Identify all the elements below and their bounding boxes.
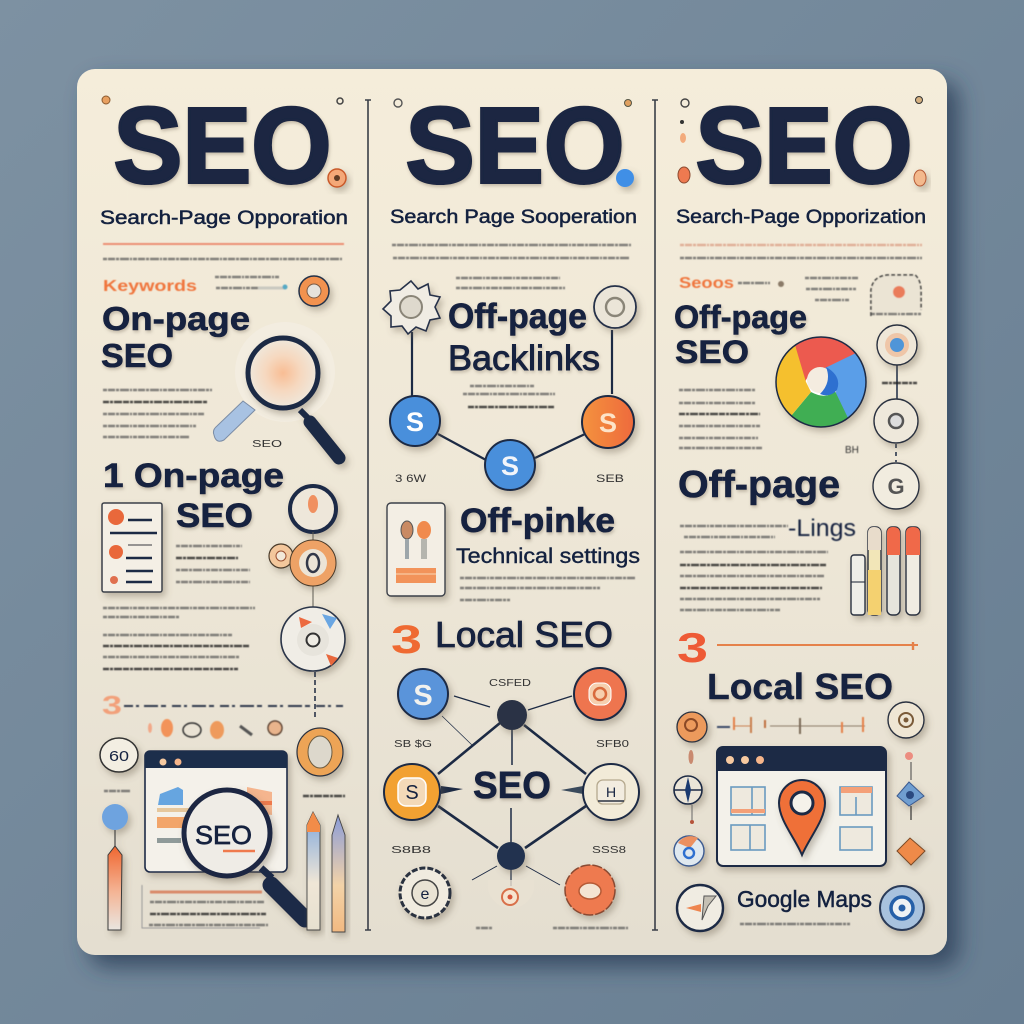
label left: 3 6W [395,473,427,485]
orange rule arrow [717,642,918,650]
icon: orange rose ring [677,712,707,742]
centre SEO label: SEO [473,765,551,807]
small labels [391,678,630,856]
icon: chrome logo [776,337,866,427]
lines label [103,608,255,617]
map tiles [731,787,872,850]
small labels: SFB0 [596,739,630,750]
icon: blue eye [897,782,924,806]
section heading off-pinke: Off-pinke [460,502,615,540]
icon: tiny drop left [688,750,694,764]
icon: ring G: G [887,474,905,499]
icon: orange dot [914,170,926,186]
small labels: SB $G [394,739,432,750]
network connectors [438,696,586,886]
body text block 3 [103,635,250,669]
subtitle: Search-Page Opporization [676,207,926,228]
body text block 2 [176,546,250,582]
node S orange right [582,396,634,448]
section heading SEO line: SEO [101,337,173,374]
icon: document checklist [102,503,162,592]
icon: beige spiral ring [888,702,924,738]
icon: magnifier over window: SEO [195,820,252,850]
tile accents [731,787,872,813]
icon: orange dot [328,169,346,187]
icon: side markers [678,96,922,183]
icon: navy ring [290,486,336,532]
icon: ring blue [877,325,917,365]
icon: orange donut [297,728,343,776]
tiny labels: BH [845,445,859,456]
section heading technical settings: Technical settings [456,545,640,568]
footer text [476,927,628,929]
section heading off-page 2: Off-page [678,464,840,506]
icon: gear bottom: e [421,886,430,903]
section heading local SEO: Local SEO [435,614,613,655]
node top [497,700,527,730]
node S orange right: S [599,408,617,438]
subtitle: Search-Page Opporation [100,208,348,229]
body text [460,578,635,600]
icon: small marker top left [394,99,402,107]
intro lines [680,245,922,258]
text block under window [142,885,268,928]
icon: orange diamond [897,838,925,865]
tiny label right [303,795,345,797]
icon: blue pencil [307,812,320,930]
map pin [779,780,825,855]
step 3 number: 3 [102,690,122,720]
node S blue left: S [406,407,424,437]
connector rings [896,365,897,462]
keyword lines [215,277,288,290]
icon: blue globe [674,836,704,866]
browser window frame [717,747,886,866]
icon: small marker top left [102,96,110,104]
tiny pin left [690,805,694,824]
step 3 rule [124,705,343,707]
section heading on-page SEO: On-page [102,300,250,337]
small icon row [148,719,282,739]
keywords label: Keywords [103,278,197,295]
section heading SEO: SEO [675,334,749,370]
node bottom [497,842,525,870]
icon: peach pencil [332,815,345,932]
section heading local SEO: Local SEO [707,666,893,707]
icon: blue ring [880,886,924,930]
column divider right [652,100,658,930]
icon: magnifier over window [184,790,305,919]
heading SEO: SEO [696,84,912,206]
label right: SEB [596,473,624,485]
icon: browser with map pin [717,747,886,866]
icon: SEO badge [100,738,138,772]
node S blue centre: S [501,451,519,481]
column divider left [365,100,371,930]
icon: beige node [594,286,636,328]
intro lines [392,245,632,288]
small labels: CSFED [489,678,531,689]
connector [312,532,314,610]
connector 3 [314,672,316,718]
footer text [740,923,850,925]
label small text [738,278,858,300]
icon: bottom small target [488,880,534,909]
section heading off-page: Off-page [674,299,807,335]
panel: column 2 off-page backlinks [383,84,640,928]
icon: magnifying glass [213,322,339,458]
small label: SEO [252,439,282,450]
node blue S [398,669,448,719]
label seos: Seoos [679,275,734,292]
icon: ring G [873,463,919,509]
icon: small marker top right [624,100,632,106]
icon: sketch card [871,275,921,316]
step number 3: 3 [677,624,708,671]
node beige right [583,764,639,820]
icon: gear [383,281,440,334]
icon: ring grey [874,399,918,443]
subtitle: Search Page Sooperation [390,207,637,228]
label google maps: Google Maps [737,886,872,912]
icon: small marker top [681,99,689,107]
technical settings blurred: -Lings [788,515,856,542]
node blue S: S [413,680,433,712]
node S blue left [390,396,440,446]
node orange left [384,764,440,820]
timeline dashes [717,717,865,734]
small labels: SSS8 [592,845,627,856]
bar chart [851,527,920,615]
icon: orange blob [565,865,615,915]
tiny stem right [910,806,912,820]
icon: browser window [145,751,287,872]
icon: tools card [387,503,445,596]
node S blue centre [485,440,535,490]
icon: red bulb pin [905,752,913,780]
connector network backlinks [412,330,612,460]
panel: column 1 on-page SEO [100,84,348,932]
section heading off-page: Off-page [448,297,587,336]
infographic card [77,69,947,955]
section heading SEO second: SEO [176,497,253,535]
icon: SEO badge: 60 [109,748,129,765]
tiny labels [845,383,917,456]
node beige right: H [606,784,616,800]
section heading backlinks: Backlinks [448,339,600,378]
icon: compass bird ring [677,885,723,931]
step number 3: 3 [391,618,422,662]
panel: column 3 off-page SEO [674,84,926,931]
icon: blue dot [616,169,634,187]
body text [679,390,762,448]
icon: blue pin pen [102,804,128,930]
body text [680,552,828,610]
tiny label left [104,790,131,792]
icon: compass [674,776,702,804]
icon: dial wheel [281,607,345,671]
icon: orange ring pair [269,540,336,586]
body text block [103,390,212,437]
intro lines [103,244,344,259]
small labels: S8B8 [391,845,432,856]
heading SEO: SEO [406,84,624,206]
section heading 1 on-page: 1 On-page [103,457,284,495]
body text [463,386,555,407]
icon: gear bottom [400,868,450,918]
heading SEO: SEO [114,84,332,206]
icon: small marker top right [337,98,343,104]
icon: orange ring [299,276,329,306]
node orange left: S [405,782,419,804]
node orange [574,668,626,720]
